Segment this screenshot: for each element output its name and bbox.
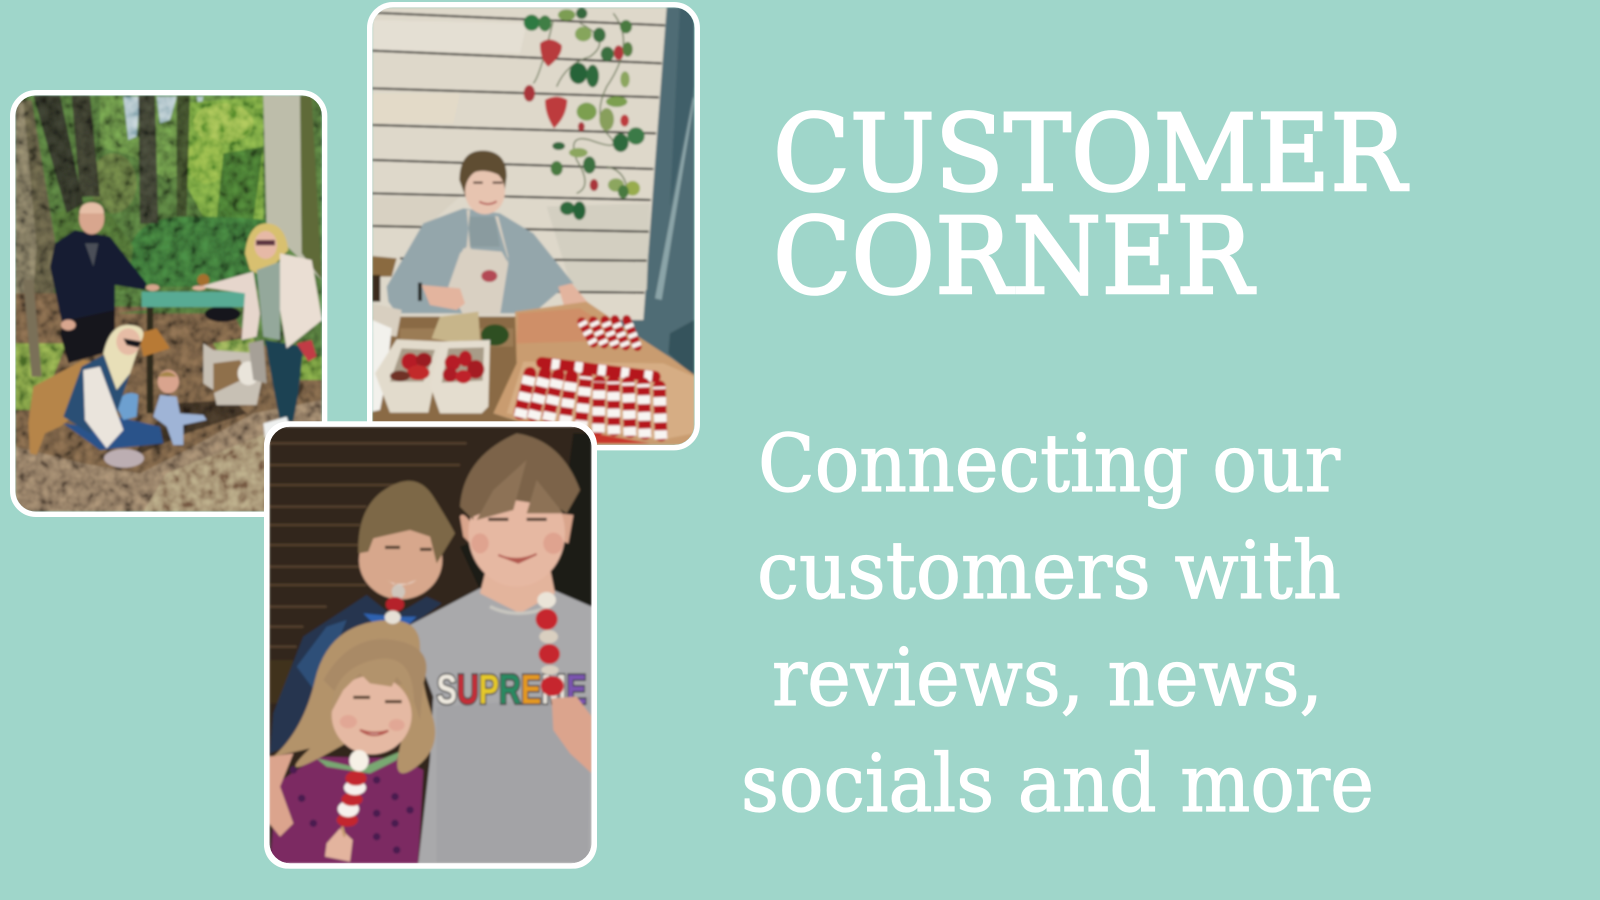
title: CUSTOMER bbox=[773, 92, 1409, 215]
person: toddler bbox=[153, 370, 207, 445]
wooden table bbox=[372, 315, 518, 422]
title: CORNER bbox=[773, 195, 1256, 318]
painted strawberry mural bbox=[524, 8, 645, 220]
person: older boy in grey tee bbox=[407, 433, 592, 863]
photo frame bbox=[267, 424, 594, 866]
subtitle text block bbox=[741, 417, 1374, 830]
person: middle boy bbox=[270, 481, 455, 753]
subtitle text block: socials and more bbox=[741, 737, 1374, 830]
photo: family at the animal paddock bbox=[13, 93, 325, 514]
animal: tan dog bbox=[28, 328, 170, 455]
tee print: SUPREME bbox=[437, 665, 587, 712]
title bbox=[773, 92, 1409, 318]
person: girl in apron bbox=[387, 151, 590, 322]
person: standing man bbox=[50, 202, 159, 363]
skewer: older boy's bbox=[536, 592, 564, 696]
baking paper and skewers bbox=[493, 302, 694, 445]
photo: girl preparing strawberry skewers bbox=[370, 5, 697, 448]
skewer: little girl's bbox=[337, 750, 369, 837]
skewer: middle boy's bbox=[385, 584, 405, 624]
photo: three children holding skewers bbox=[264, 421, 597, 869]
bench behind sitter bbox=[372, 256, 397, 277]
photo frame bbox=[370, 5, 697, 448]
person: little girl bbox=[269, 620, 435, 863]
person: woman in cream jacket bbox=[192, 223, 322, 438]
white containers bbox=[372, 303, 490, 413]
subtitle text block: customers with bbox=[757, 524, 1341, 617]
subtitle text block: Connecting our bbox=[758, 417, 1341, 510]
person: crouching woman bbox=[63, 325, 163, 468]
photo frame bbox=[13, 93, 325, 514]
subtitle text block: reviews, news, bbox=[772, 631, 1323, 724]
animals: goats bbox=[203, 340, 267, 405]
